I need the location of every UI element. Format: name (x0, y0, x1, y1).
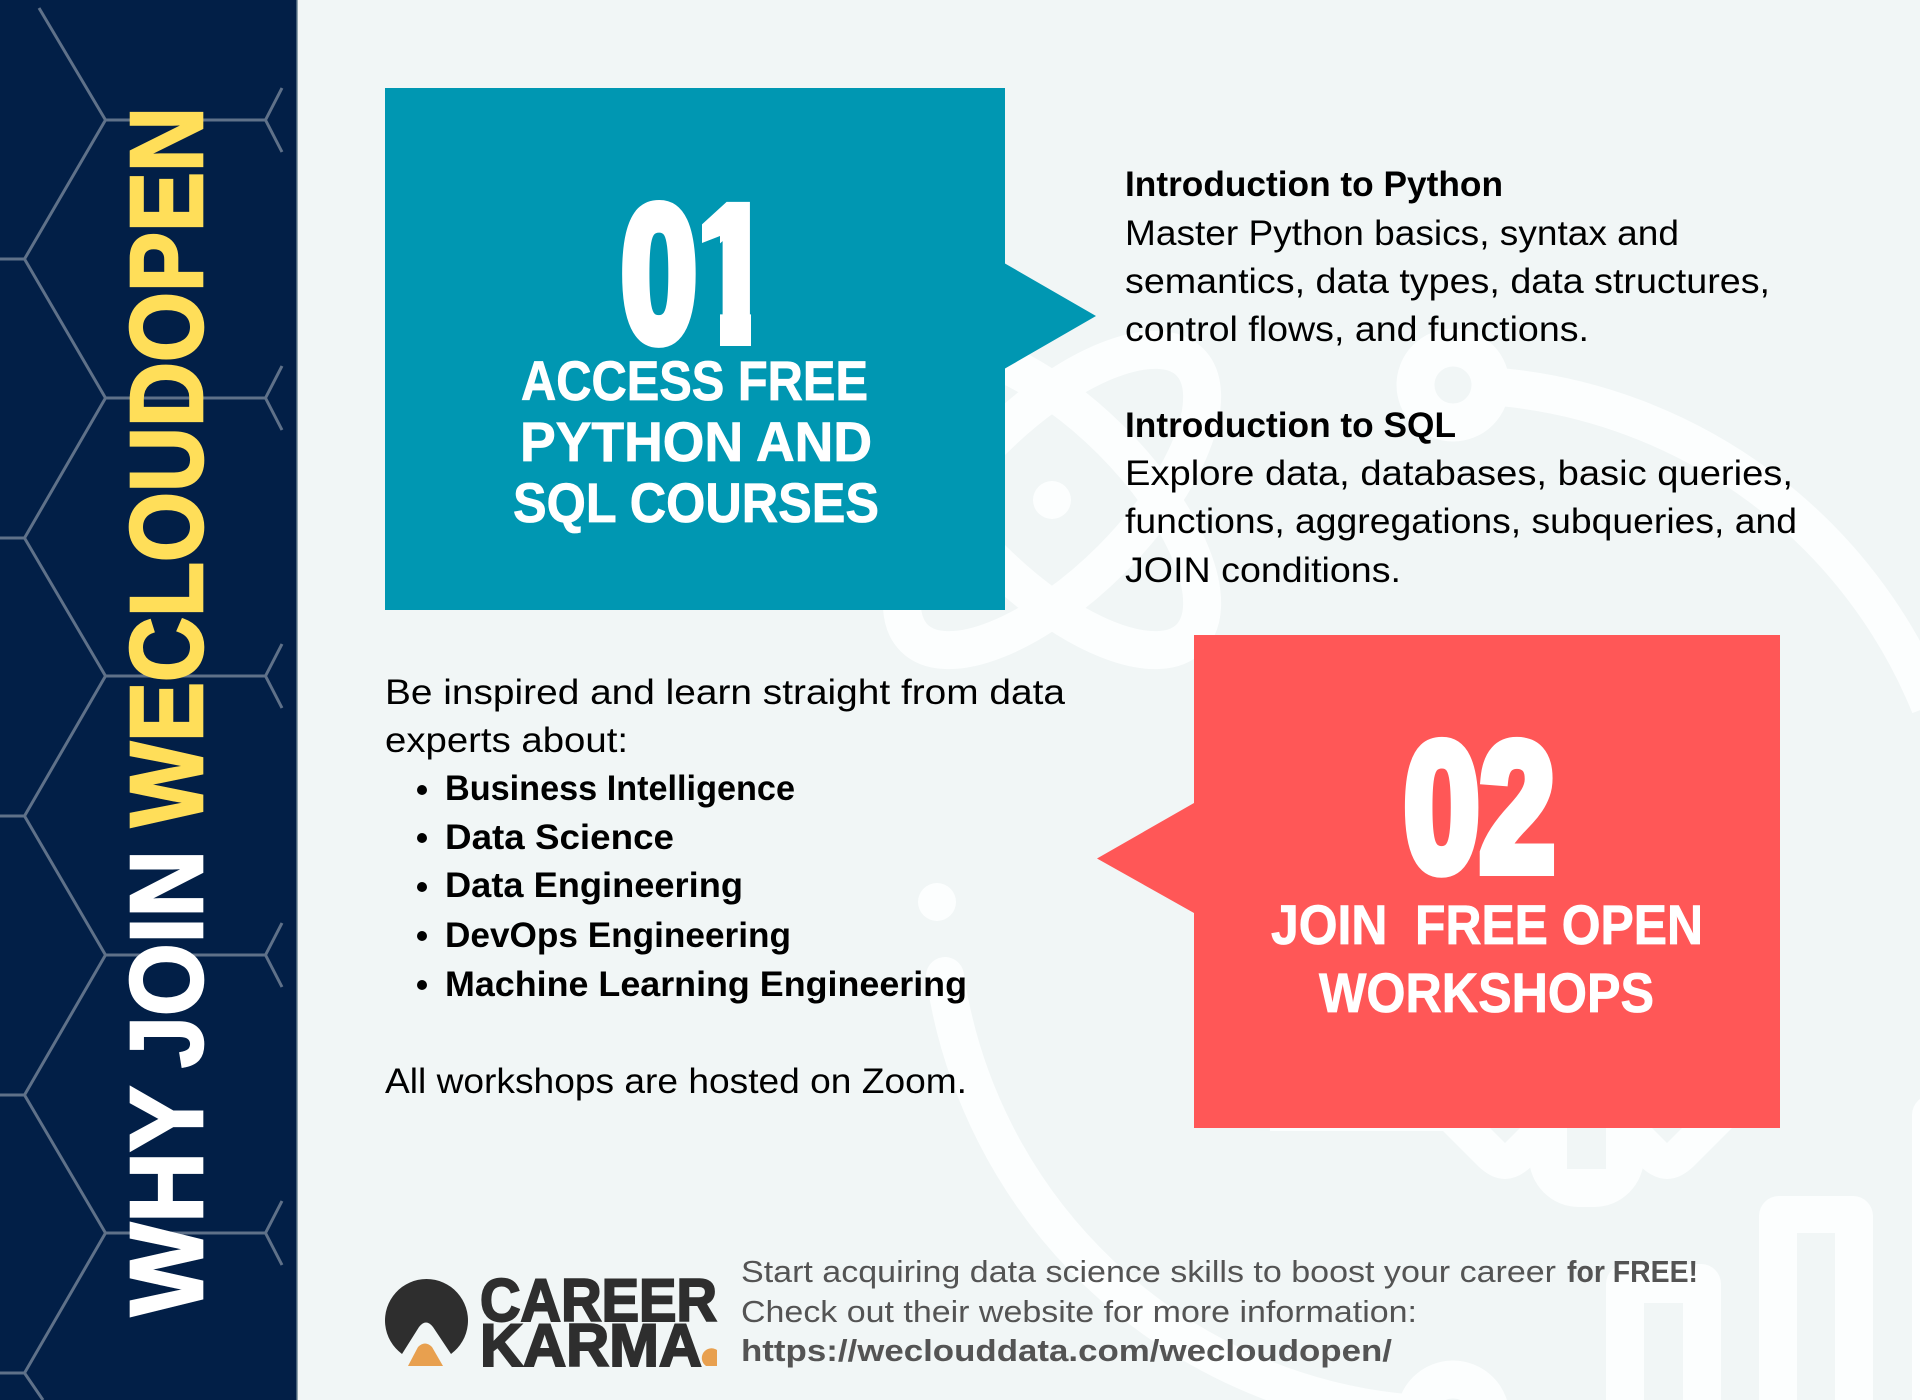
panel: 01 courses callout (385, 88, 1096, 610)
text block: footer call to action: https://weclouddata.com/wecloudopen/ (741, 1333, 1392, 1368)
bullet list of topics (417, 769, 967, 1004)
heading: access free python and sql courses (513, 349, 879, 534)
heading: access free python and sql courses: SQL COURSES (513, 471, 879, 534)
bullet list of topics: Data Science (445, 818, 674, 857)
text block: sql course: Introduction to SQL (1125, 406, 1456, 445)
text block: footer call to action: for FREE! (1567, 1254, 1698, 1289)
text block: sql course: Explore data, databases, basic queries, (1125, 454, 1793, 493)
text block: footer call to action: Start acquiring data science skills to boost your career (741, 1254, 1556, 1289)
logo mark (385, 1279, 468, 1366)
callout box with arrow (385, 88, 1096, 610)
heading: join free open workshops: JOIN FREE OPEN (1271, 893, 1703, 956)
text block: python course: Introduction to Python (1125, 165, 1503, 204)
bullet list of topics: Machine Learning Engineering (445, 965, 967, 1004)
icon: orbit ring with nodes (918, 348, 1920, 1400)
heading: access free python and sql courses: ACCESS FREE (521, 349, 868, 412)
bullet list of topics: DevOps Engineering (445, 916, 791, 955)
background watermark icons (855, 303, 1920, 1400)
logo orange dot (702, 1348, 717, 1366)
hexagon line pattern (0, 8, 282, 1400)
bullet list of topics: Data Engineering (445, 866, 743, 905)
heading: join free open workshops (1271, 893, 1703, 1024)
text block: sql course: functions, aggregations, subqueries, and (1125, 502, 1797, 541)
text block: python course: semantics, data types, data structures, (1125, 262, 1770, 301)
logo wordmark (480, 1267, 717, 1379)
text block: python course (1125, 165, 1770, 349)
text block: python course: Master Python basics, syntax and (1125, 214, 1679, 253)
callout box with arrow (1097, 635, 1780, 1128)
icon: arrows and bracket behind workshop box (1270, 1088, 1742, 1207)
logo: career karma (385, 1267, 717, 1379)
icon: bar chart (1606, 1095, 1920, 1400)
text block: workshops description (385, 673, 1066, 1101)
number 01: 0 (621, 166, 697, 381)
panel: 02 workshops callout (1097, 635, 1780, 1128)
text block: workshops description: experts about: (385, 721, 628, 760)
text block: workshops description: Be inspired and learn straight from data (385, 673, 1066, 712)
bullet list of topics: Business Intelligence (445, 769, 795, 808)
sidebar title: WHY (109, 1086, 224, 1316)
text block: sql course: JOIN conditions. (1125, 551, 1401, 590)
sidebar title: WECLOUDOPEN (109, 107, 224, 827)
number 01: 1 (695, 166, 771, 381)
text block: python course: control flows, and functions. (1125, 310, 1589, 349)
text block: footer call to action (741, 1254, 1698, 1368)
sidebar title (109, 107, 224, 1316)
heading: join free open workshops: WORKSHOPS (1319, 961, 1654, 1024)
icon: atom (855, 303, 1249, 697)
number 01 (621, 166, 785, 381)
logo wordmark: KARMA (480, 1312, 702, 1379)
text block: workshops description: All workshops are hosted on Zoom. (385, 1062, 967, 1101)
panel: sidebar (0, 0, 298, 1400)
logo wordmark: CAREER (480, 1267, 717, 1334)
number 02: 02 (1404, 705, 1555, 909)
heading: access free python and sql courses: PYTHON AND (520, 410, 872, 473)
text block: sql course (1125, 406, 1797, 590)
sidebar title: JOIN (109, 850, 224, 1068)
text block: footer call to action: Check out their website for more information: (741, 1294, 1417, 1329)
